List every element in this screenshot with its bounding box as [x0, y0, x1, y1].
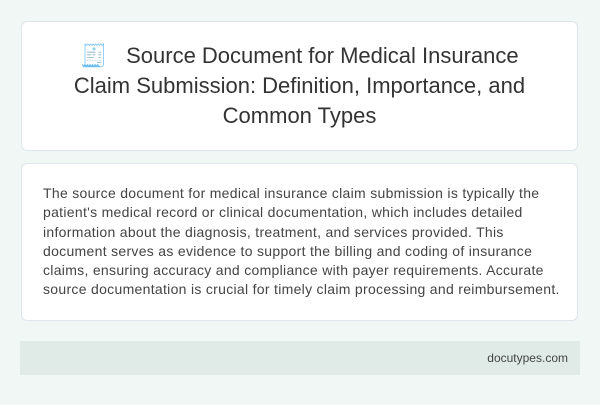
description text — [43, 185, 560, 297]
footer: docutypes.com — [487, 351, 568, 365]
title panel — [21, 21, 578, 151]
description text: information about the diagnosis, treatment, and services provided. This — [43, 224, 504, 240]
title: 🧾 Source Document for Medical Insurance Claim Submission: Definition, Importance, and Common Types — [74, 43, 525, 128]
description panel — [21, 163, 578, 321]
description text: patient's medical record or clinical documentation, which includes detailed — [43, 204, 523, 220]
footer — [20, 341, 580, 375]
description text: document serves as evidence to support the billing and coding of insurance — [43, 243, 532, 259]
description text: claims, ensuring accuracy and compliance with payer requirements. Accurate — [43, 262, 544, 278]
description text: source documentation is crucial for timely claim processing and reimbursement. — [43, 281, 560, 297]
description text: The source document for medical insurance claim submission is typically the — [43, 185, 539, 201]
